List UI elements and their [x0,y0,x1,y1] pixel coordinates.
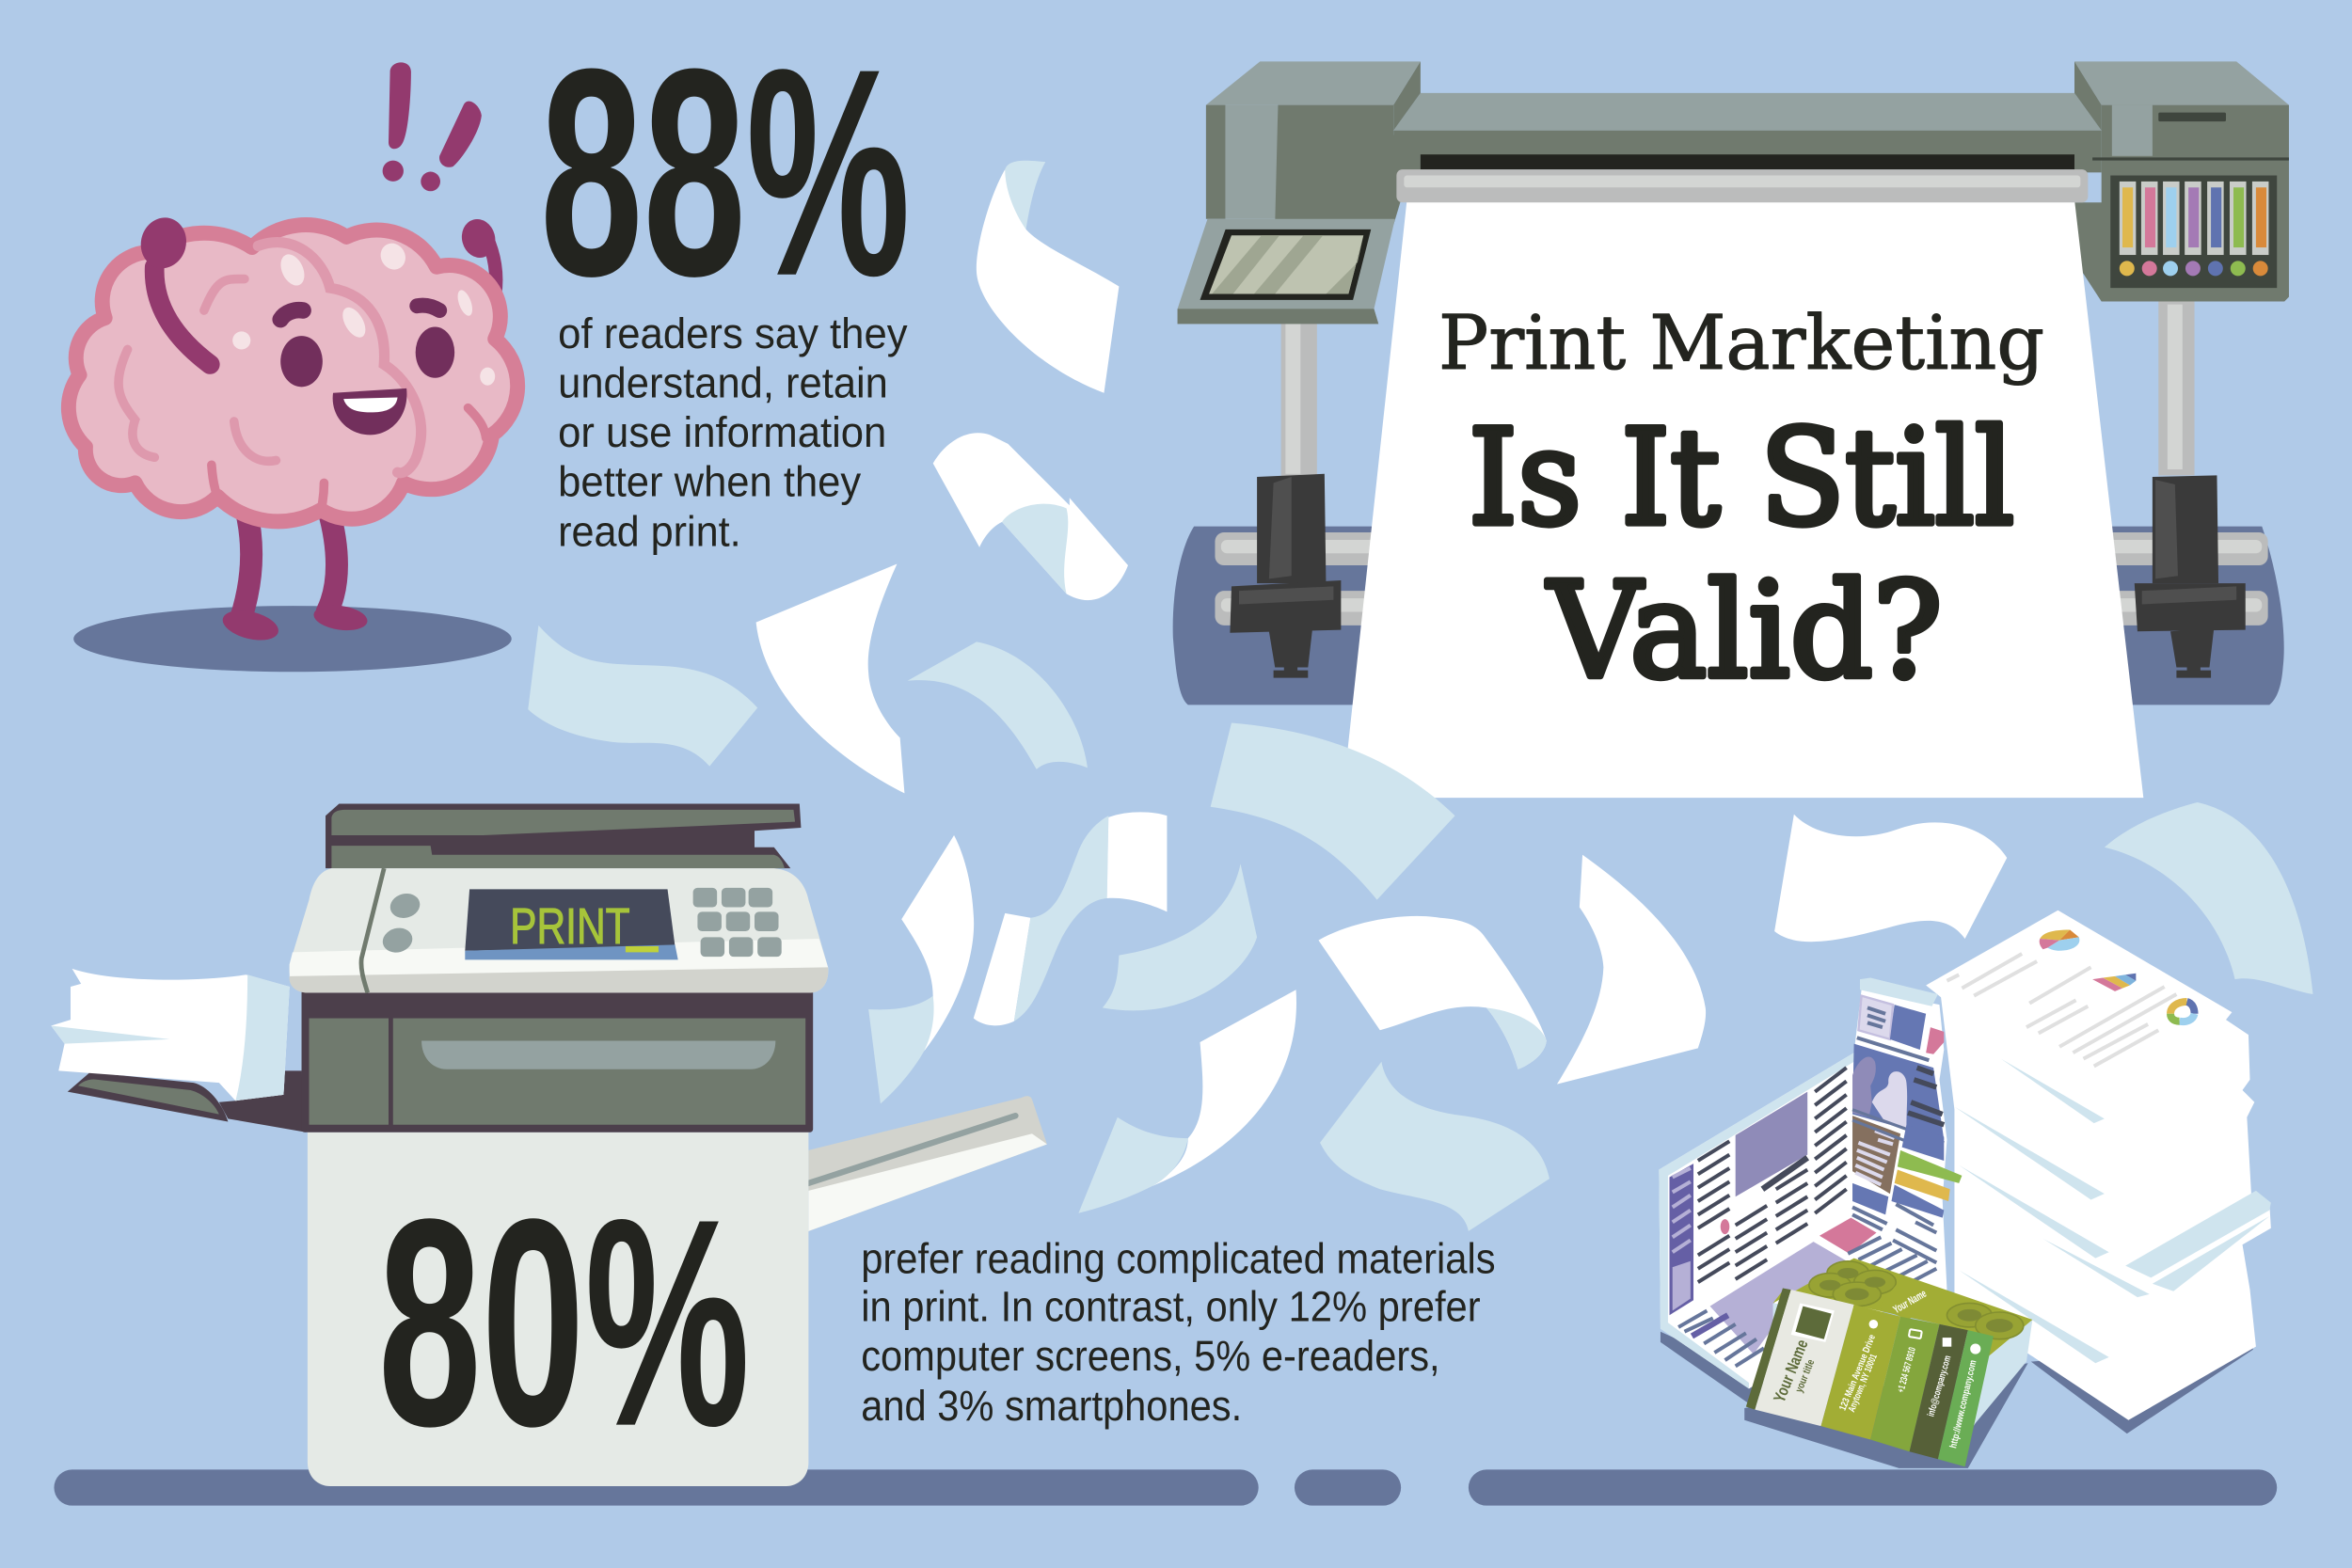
left tower [1206,61,1421,225]
roller [1396,169,2088,202]
text block: 88% description: read print. [558,507,741,555]
brain body [69,225,517,521]
folded newsletter [1659,977,1962,1403]
picture block [1736,1092,1807,1196]
icon: surprised brain character [69,62,517,672]
right arm [489,243,496,303]
paper 2 [933,433,1128,600]
text block: 80% description [861,1235,1496,1430]
paper sheet [1343,199,2143,798]
title [1438,299,2044,708]
card stack top [1773,1259,2032,1357]
paper 12 [1320,1062,1549,1231]
text block: 80% description: in print. In contrast, only 12% prefer [861,1283,1481,1331]
text columns [1698,1068,1847,1282]
text block: 88% description: better when they [558,458,861,506]
paper 4 [528,626,757,767]
paper 6 [1211,722,1455,900]
drawer section [302,990,813,1132]
display screen [465,889,678,959]
illustration: stack of printed materials [1659,911,2271,1468]
blue base [1173,527,2284,705]
sidebar [1670,1164,1693,1315]
paper 5 [908,641,1088,769]
card text: Your Name [1770,1337,1812,1405]
card stack side [1773,1303,2032,1440]
control panel [290,868,828,992]
card text: 123 Main Avenue Drive [1838,1333,1878,1412]
left arm [154,267,210,364]
paper 11 [1318,916,1547,1069]
business cards [1744,1259,2032,1468]
card text: http://www.company.com [1948,1359,1979,1449]
ink cartridges [2110,176,2277,288]
brown article [1852,1110,1944,1194]
brain highlights [232,239,495,386]
left clamp [1230,474,1341,678]
icon: large format printer [1173,61,2289,798]
paper 9 [1103,863,1257,1010]
paper 14 [1774,815,2007,942]
ground bars [54,1469,2277,1506]
card front [1746,1289,1994,1466]
report text lines [1947,954,2176,1067]
control panel [1178,219,1395,324]
card text: your title [1793,1358,1817,1394]
text block: 80% description: and 3% smartphones. [861,1382,1242,1430]
text block: 80% description: prefer reading complicated materials [861,1235,1496,1283]
upper page blocks [1857,996,1944,1060]
QR code [1791,1303,1835,1342]
paper stack in tray [51,969,290,1101]
card text: +1 234 567 8910 [1897,1346,1918,1394]
pie chart [2040,929,2079,951]
paper 3 [756,563,904,793]
keypad [693,888,782,957]
text block: 88% description: understand, retain [558,358,888,406]
central beam [1393,93,2102,172]
brain folds [119,243,486,510]
text block: 88% description: or use information [558,408,886,456]
copier body [308,1132,808,1486]
right tower [2074,61,2289,301]
card top text: Your Name [1891,1287,1929,1316]
card text: Anytown, NY 10001 [1847,1353,1880,1414]
floor block [1710,1242,1850,1354]
heading line: Is It Still: Is It Still [1469,402,2014,555]
text block: 88% description: of readers say they [558,309,908,357]
support poles [1281,298,2195,477]
paper 15 [2105,802,2312,994]
stat: 80%: 80% [378,1158,750,1488]
floor text lines [1678,1237,1936,1366]
exclamation marks [383,62,482,191]
triangle chart [2092,974,2136,991]
icon: office copier [51,804,1047,1486]
output tray [808,1096,1047,1231]
rail bars [1215,532,2268,626]
paper 1 [977,161,1119,393]
card icons [1869,1320,1980,1354]
paper 13 [1557,855,1706,1085]
shadow under brain [73,606,512,672]
flying paper sheets [528,161,2312,1231]
heading line: Valid?: Valid? [1546,555,1943,708]
pink diamond [1820,1218,1877,1254]
card text: info@company.com [1926,1354,1953,1418]
paper 8 [974,812,1167,1025]
right clamp [2135,475,2246,678]
text block: 80% description: computer screens, 5% e-readers, [861,1332,1440,1380]
paper feed tray [68,1070,306,1132]
paper stack [1926,911,2271,1433]
screen text: PRINT: PRINT [510,899,630,955]
legs [240,510,337,621]
stat: 88%: 88% [540,8,911,338]
paper 7 [868,835,974,1103]
card stack shadow [1744,1363,2028,1468]
heading line: Print Marketing: Print Marketing [1438,299,2044,387]
coloured stripes [1852,1125,1962,1262]
text block: 88% description [558,309,908,555]
donut chart [2170,1002,2195,1022]
paper 10 [1078,990,1296,1213]
card text [1770,1333,1979,1449]
photo [1852,1044,1944,1140]
lid [326,804,801,868]
face [280,306,454,435]
